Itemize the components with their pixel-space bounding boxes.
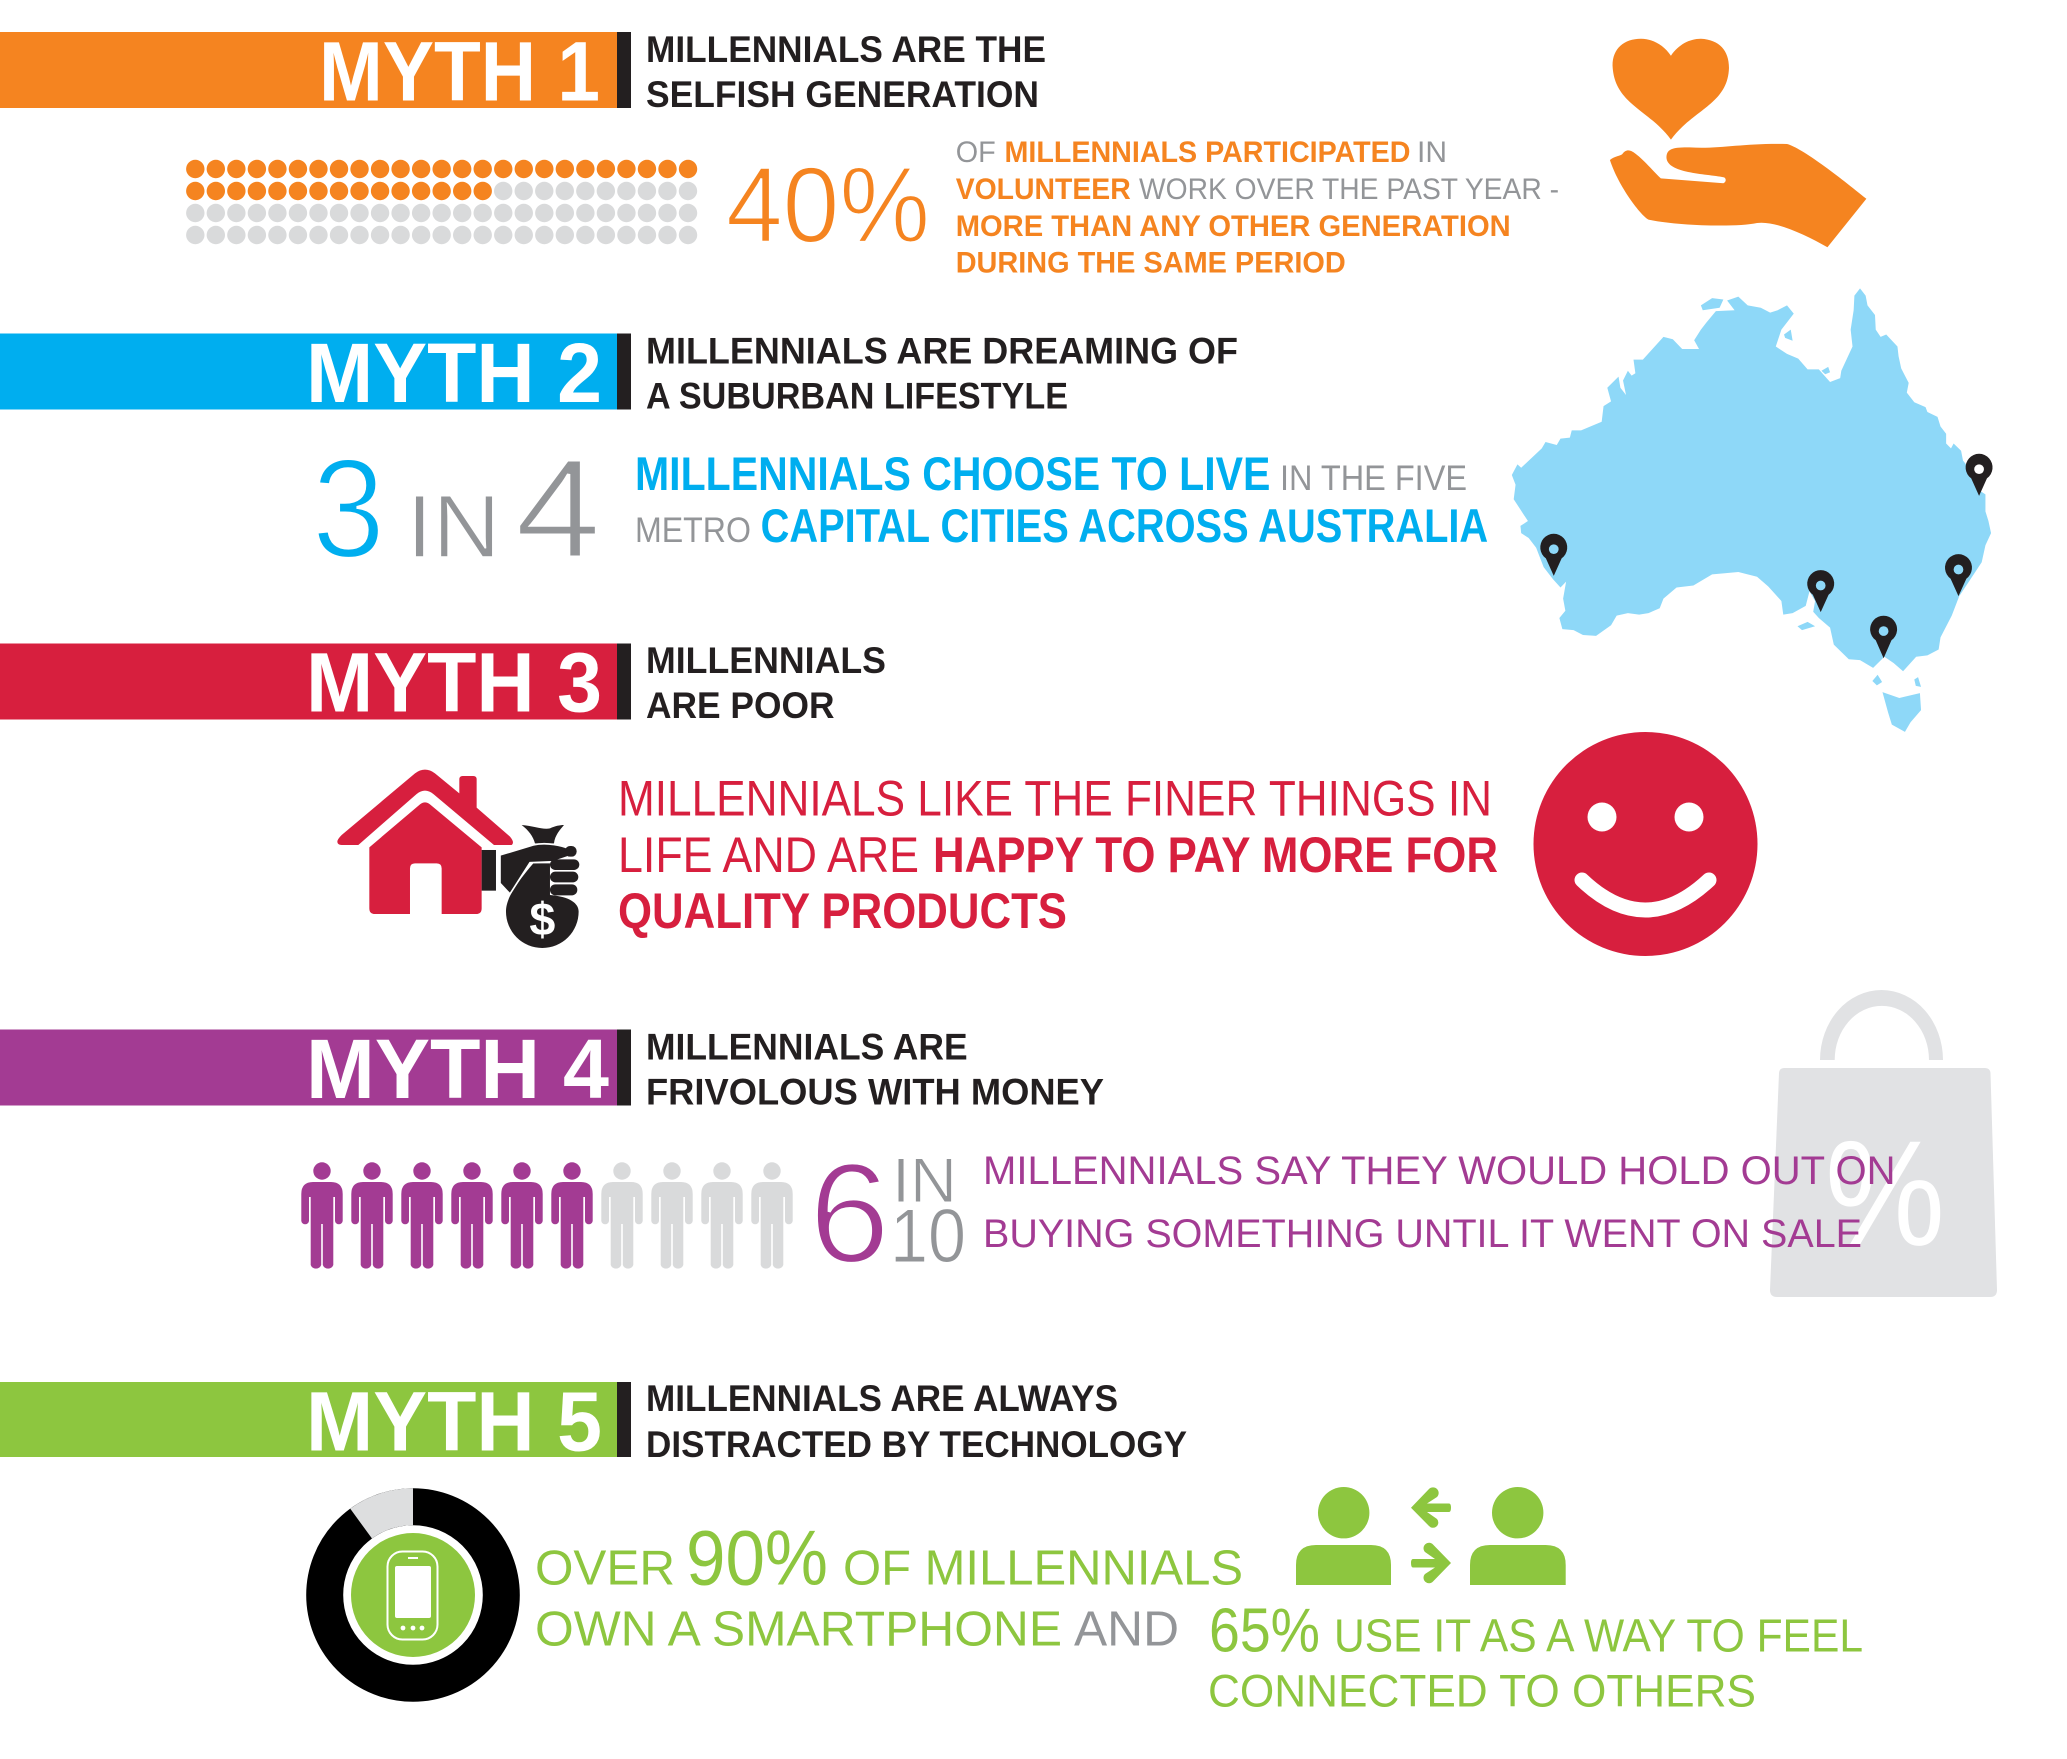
finer things text: LIFE AND ARE (618, 827, 919, 883)
finer things text (618, 770, 1498, 939)
volunteer text: OF (956, 136, 996, 169)
icon: house and money bag: $ (529, 893, 555, 945)
icon: shopping bag with percent (1770, 990, 1997, 1297)
hold out text (983, 1149, 1896, 1256)
myth 1 heading: SELFISH GENERATION (646, 74, 1039, 115)
capital cities text: METRO (635, 511, 751, 550)
myth 5 heading (646, 1378, 1187, 1465)
myth 3 banner (0, 636, 631, 730)
pin: Perth (1540, 534, 1567, 576)
pin: Melbourne (1870, 616, 1897, 658)
pin: Adelaide (1807, 570, 1834, 612)
myth 4 banner: MYTH 4 (306, 1022, 609, 1116)
capital cities text: CAPITAL CITIES ACROSS AUSTRALIA (761, 499, 1488, 552)
myth 5 banner (0, 1374, 631, 1468)
connected text (1208, 1596, 1863, 1716)
smartphone text: 90% (686, 1514, 828, 1602)
myth 4 heading: FRIVOLOUS WITH MONEY (646, 1072, 1104, 1112)
myth 2 banner: MYTH 2 (306, 326, 602, 420)
smartphone text (535, 1514, 1243, 1656)
smartphone text: OWN A SMARTPHONE (535, 1602, 1062, 1656)
capital cities text: MILLENNIALS CHOOSE TO LIVE (635, 447, 1270, 500)
myth 1 banner (0, 24, 631, 118)
myth 5 banner: MYTH 5 (306, 1374, 602, 1468)
icon: shopping bag with percent: % (1825, 1109, 1945, 1277)
stat: 3 in 4: 3 (312, 429, 385, 587)
myth 3 heading: ARE POOR (646, 685, 834, 726)
stat: 6 in 10 (809, 1134, 966, 1293)
dot chart: 40 of 100 (195, 169, 690, 235)
volunteer text: DURING THE SAME PERIOD (956, 246, 1346, 280)
donut chart with smartphone icon (325, 1507, 501, 1683)
myth 3 heading (646, 640, 886, 726)
stat: 6 in 10: 6 (809, 1134, 890, 1293)
myth 2 banner (0, 326, 631, 420)
panel: myth 1 (0, 24, 1866, 280)
icon: heart above hand (1610, 39, 1866, 247)
myth 2 heading (646, 330, 1238, 416)
capital cities text: IN THE FIVE (1280, 459, 1467, 498)
myth 1 heading (646, 29, 1046, 115)
volunteer text: IN (1417, 136, 1447, 169)
hold out text: MILLENNIALS SAY THEY WOULD HOLD OUT ON (983, 1149, 1896, 1193)
myth 5 heading: DISTRACTED BY TECHNOLOGY (646, 1424, 1187, 1465)
panel: myth 2 (0, 288, 1993, 732)
myth 4 heading: MILLENNIALS ARE (646, 1026, 968, 1068)
volunteer text: WORK OVER THE PAST YEAR - (1139, 173, 1559, 206)
volunteer text: VOLUNTEER (956, 173, 1131, 206)
finer things text: QUALITY PRODUCTS (618, 883, 1067, 939)
finer things text: HAPPY TO PAY MORE FOR (933, 827, 1498, 883)
myth 3 heading: MILLENNIALS (646, 640, 886, 681)
icon: smiley face (1534, 732, 1758, 956)
pin: Brisbane (1966, 454, 1993, 496)
hold out text: BUYING SOMETHING UNTIL IT WENT ON SALE (983, 1212, 1862, 1256)
connected text: 65% (1209, 1596, 1320, 1666)
myth 2 heading: A SUBURBAN LIFESTYLE (646, 376, 1068, 416)
panel: myth 3 (0, 636, 1758, 956)
finer things text: MILLENNIALS LIKE THE FINER THINGS IN (618, 770, 1492, 826)
stat: 3 in 4: IN (406, 476, 500, 576)
pictogram: 6 of 10 people (301, 1162, 793, 1269)
myth 4 banner (0, 1022, 631, 1116)
panel: myth 4 (0, 990, 1997, 1297)
connected text: USE IT AS A WAY TO FEEL (1334, 1610, 1863, 1662)
myth 4 heading (646, 1026, 1104, 1112)
connected text: CONNECTED TO OTHERS (1208, 1666, 1756, 1716)
panel: myth 5 (0, 1374, 1863, 1716)
myth 1 heading: MILLENNIALS ARE THE (646, 29, 1046, 70)
myth 5 heading: MILLENNIALS ARE ALWAYS (646, 1378, 1118, 1419)
myth 3 banner: MYTH 3 (306, 636, 602, 730)
smartphone text: AND (1074, 1602, 1179, 1656)
stat: 6 in 10: IN (892, 1146, 957, 1216)
myth 1 banner: MYTH 1 (319, 24, 600, 118)
stat: 6 in 10: 10 (890, 1194, 966, 1279)
smartphone text: OF MILLENNIALS (843, 1542, 1243, 1596)
volunteer text (956, 136, 1559, 280)
volunteer text: MILLENNIALS PARTICIPATED (1004, 136, 1410, 169)
icon: two people connected (1296, 1487, 1566, 1585)
stat: 3 in 4 (312, 429, 601, 587)
myth 2 heading: MILLENNIALS ARE DREAMING OF (646, 330, 1238, 372)
map: Australia with city pins (1512, 288, 1993, 732)
smartphone text: OVER (535, 1542, 675, 1596)
stat: 3 in 4: 4 (515, 429, 601, 587)
capital cities text (635, 447, 1488, 552)
icon: house and money bag (337, 770, 579, 948)
pin: Sydney (1945, 554, 1972, 596)
volunteer text: MORE THAN ANY OTHER GENERATION (956, 210, 1511, 243)
stat: 40%: 40% (726, 144, 930, 265)
